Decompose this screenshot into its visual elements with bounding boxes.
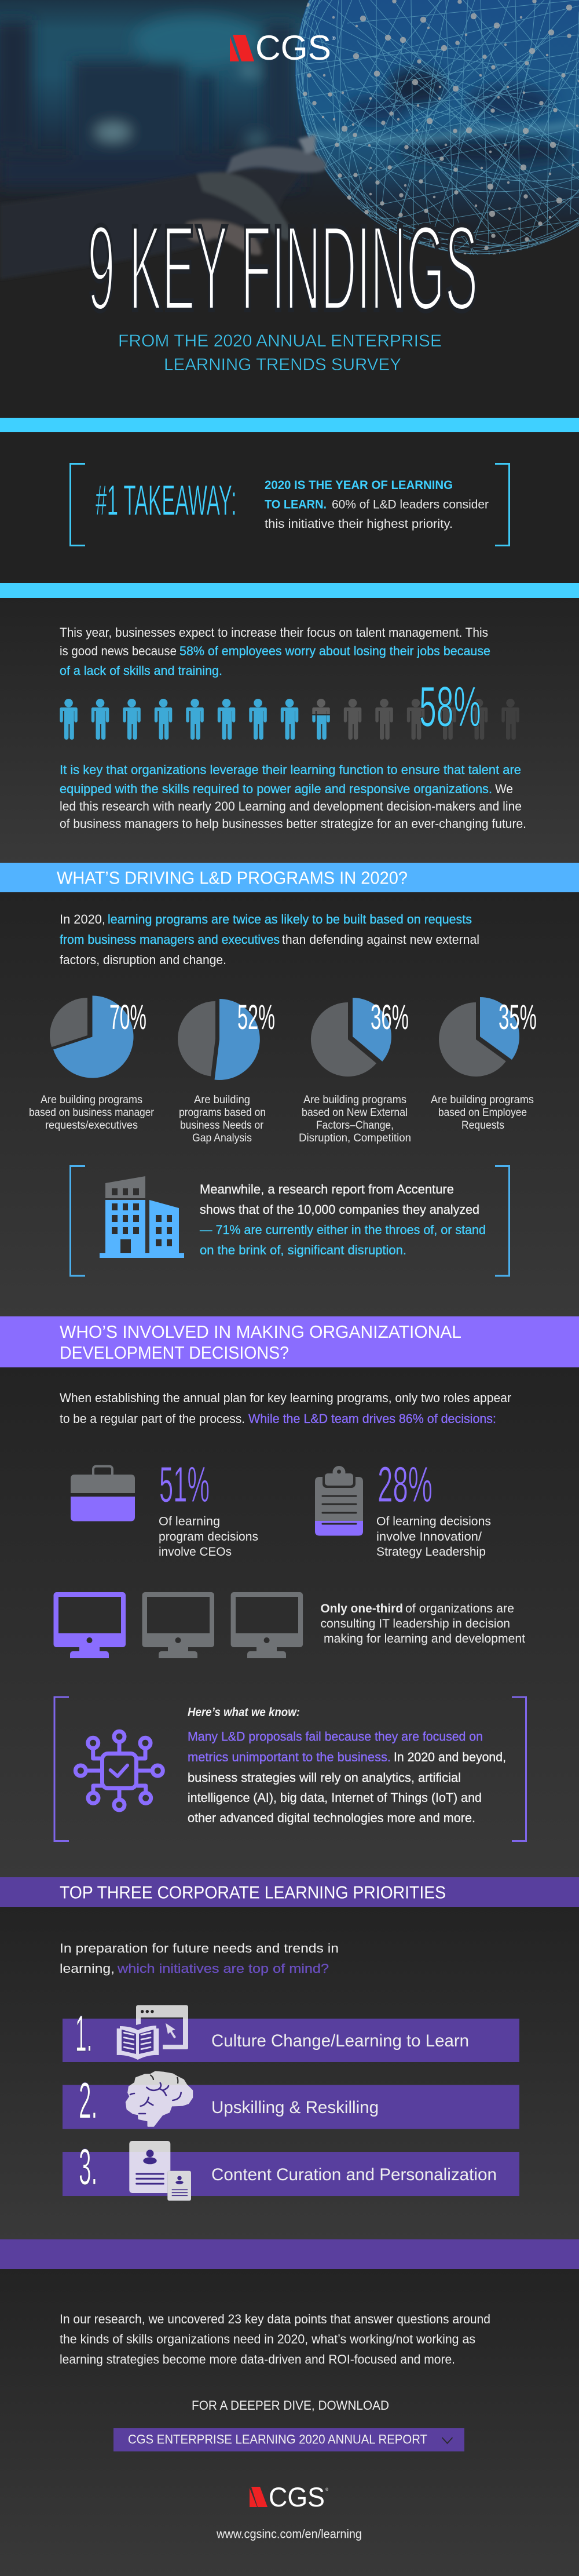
network sphere [295, 0, 579, 255]
section heading: what's driving L&D: WHAT’S DRIVING L&D PROGRAMS IN 2020? [57, 868, 408, 888]
section heading: top three priorities: TOP THREE CORPORATE LEARNING PRIORITIES [60, 1883, 446, 1903]
text block: drivers intro: than defending against new external [282, 932, 479, 947]
stat text: CEOs: involve CEOs [159, 1545, 232, 1559]
stat text: innovation: Of learning decisions [376, 1515, 491, 1528]
section heading: top three priorities [0, 1877, 579, 1907]
icon: brain [126, 2072, 192, 2126]
pie label: 70% [29, 1094, 155, 1132]
subtitle: LEARNING TRENDS SURVEY [164, 355, 401, 374]
takeaway text: 60% of L&D leaders consider [332, 498, 489, 511]
logo: CGS footer: CGS [269, 2482, 325, 2512]
icon: book and browser window [117, 2005, 188, 2060]
text block: intro [60, 625, 490, 678]
text block: leverage learning: It is key that organizations leverage their learning function to ensure that talent are [60, 762, 521, 777]
pie label: 36%: Disruption, Competition [299, 1132, 411, 1144]
pie chart: 70%: 70% [109, 998, 146, 1037]
section heading: who's involved [0, 1316, 579, 1367]
icon: circuit with check mark [75, 1731, 163, 1810]
download prompt: FOR A DEEPER DIVE, DOWNLOAD [192, 2398, 389, 2413]
subtitle [118, 331, 442, 374]
text block: here's what we know: metrics unimportant to the business. [188, 1750, 391, 1764]
priority 2 bar: 2. [79, 2073, 97, 2129]
panel: drivers [0, 892, 579, 1316]
stat: 28%: 28% [378, 1456, 433, 1513]
pie label: 36%: Are building programs [303, 1094, 406, 1106]
text block: intro: This year, businesses expect to increase their focus on talent management. This [60, 625, 488, 640]
hand reaching to sphere [0, 134, 326, 279]
pictogram: 58 percent of people [60, 699, 519, 740]
logo: CGS: ® [332, 35, 336, 41]
pie label: 52%: Gap Analysis [192, 1132, 252, 1144]
text block: research summary [60, 2312, 490, 2367]
text block: decisions intro: While the L&D team drives 86% of decisions: [248, 1411, 496, 1426]
text block: leverage learning: equipped with the skills required to power agile and responsive organizations. [60, 782, 492, 796]
text block: drivers intro: learning programs are twice as likely to be built based on requests [108, 912, 472, 926]
stat text: CEOs: program decisions [159, 1530, 258, 1544]
text block: drivers intro: factors, disruption and change. [60, 953, 226, 967]
text block: drivers intro: In 2020, [60, 912, 105, 926]
pie label: 52%: programs based on [179, 1107, 266, 1119]
stat: 51%: 51% [159, 1457, 210, 1513]
pie chart: 35%: 35% [499, 999, 537, 1037]
text block: IT leadership: making for learning and development [324, 1632, 525, 1645]
text block: Accenture callout [200, 1182, 486, 1257]
text block: Accenture callout: on the brink of, significant disruption. [200, 1243, 406, 1257]
takeaway heading: #1 TAKEAWAY: [96, 477, 237, 525]
stat text: innovation: involve Innovation/ [376, 1530, 482, 1544]
text block: Accenture callout: shows that of the 10,000 companies they analyzed [200, 1202, 479, 1217]
text block: decisions intro [60, 1391, 511, 1426]
text block: here's what we know: intelligence (AI), big data, Internet of Things (IoT) and [188, 1790, 482, 1805]
text block: here's what we know: In 2020 and beyond, [394, 1750, 506, 1764]
priority 3 bar [63, 2139, 519, 2201]
text block: intro: 58% of employees worry about losing their jobs because [179, 644, 490, 658]
pie label: 35%: Requests [461, 1119, 504, 1132]
takeaway text: TO LEARN. [265, 498, 327, 511]
priority 2 bar [63, 2072, 519, 2129]
pie label: 36%: Factors–Change, [316, 1119, 394, 1132]
text block: here's what we know: Many L&D proposals fail because they are focused on [188, 1730, 483, 1744]
panel: footer [0, 2269, 579, 2576]
text block: drivers intro [60, 912, 479, 967]
pie label: 70%: based on business manager [29, 1107, 155, 1119]
text block: IT leadership: of organizations are [405, 1601, 514, 1615]
priority 1 bar [63, 2005, 519, 2063]
text block: research summary: the kinds of skills organizations need in 2020, what’s working/not working as [60, 2332, 475, 2347]
pie chart: 70% [50, 995, 146, 1078]
pie label: 52% [179, 1094, 266, 1144]
pie label: 35% [431, 1094, 534, 1132]
pie chart: 52% [178, 998, 275, 1080]
brackets [54, 1697, 526, 1841]
panel: decision makers [0, 1367, 579, 1877]
pie label: 36% [299, 1094, 411, 1144]
icon: monitor, gray [231, 1592, 303, 1658]
text block: research summary: learning strategies become more data-driven and ROI-focused and more. [60, 2352, 455, 2367]
text block: decisions intro: to be a regular part of the process. [60, 1411, 245, 1426]
text block: leverage learning [60, 762, 526, 831]
text block: research summary: In our research, we uncovered 23 key data points that answer questions around [60, 2312, 490, 2326]
text block: here's what we know: other advanced digital technologies more and more. [188, 1811, 475, 1825]
text block: priorities intro: In preparation for future needs and trends in [60, 1941, 339, 1955]
icon: clipboard [315, 1466, 363, 1535]
website url: www.cgsinc.com/en/learning [216, 2528, 362, 2541]
stat text: innovation [376, 1515, 491, 1559]
icon: profile cards [129, 2141, 191, 2201]
text block: decisions intro: When establishing the annual plan for key learning programs, only two roles appear [60, 1391, 511, 1405]
button: annual report: CGS ENTERPRISE LEARNING 2020 ANNUAL REPORT [128, 2432, 427, 2446]
button: annual report [113, 2428, 464, 2451]
stat text: CEOs: Of learning [159, 1515, 220, 1528]
text block: Accenture callout: — 71% are currently either in the throes of, or stand [200, 1223, 486, 1237]
pie chart: 36%: 36% [371, 999, 409, 1037]
pie chart: 35% [439, 997, 537, 1077]
text block: intro: of a lack of skills and training. [60, 663, 222, 678]
text block: priorities intro: which initiatives are top of mind? [117, 1961, 329, 1976]
subtitle: FROM THE 2020 ANNUAL ENTERPRISE [118, 331, 442, 351]
brackets [71, 464, 510, 546]
pie label: 35%: based on Employee [438, 1107, 527, 1119]
text block: drivers intro: from business managers and executives [60, 932, 280, 947]
divider bar: cyan [0, 583, 579, 598]
pie label: 35%: Are building programs [431, 1094, 534, 1106]
icon: office building [100, 1176, 184, 1258]
panel: priorities [0, 1907, 579, 2239]
text block: IT leadership [321, 1601, 525, 1645]
stat: 58%: 58% [419, 675, 481, 739]
text block: here's what we know: Here’s what we know: [188, 1705, 300, 1719]
text block: priorities intro [60, 1941, 339, 1976]
stat text: CEOs [159, 1515, 258, 1559]
priority 1 bar: 1. [75, 2005, 92, 2063]
takeaway text: this initiative their highest priority. [265, 517, 453, 531]
text block: leverage learning: of business managers to help businesses better strategize for an ever-changing future. [60, 816, 526, 831]
icon: briefcase [71, 1466, 135, 1521]
divider bar: cyan [0, 418, 579, 432]
text block: priorities intro: learning, [60, 1961, 115, 1976]
pie chart: 36% [311, 998, 409, 1077]
pie label: 70%: Are building programs [41, 1094, 142, 1106]
pie label: 70%: requests/executives [45, 1119, 138, 1132]
pie chart: 52%: 52% [237, 998, 275, 1037]
divider bar: purple [0, 2239, 579, 2269]
pie label: 52%: Are building [194, 1094, 250, 1106]
section heading: what's driving L&D [0, 863, 579, 892]
text block: IT leadership: Only one-third [321, 1601, 403, 1615]
panel: number one takeaway [0, 432, 579, 583]
priority 2 bar: Upskilling & Reskilling [211, 2098, 379, 2117]
title: 9 KEY FINDINGS [87, 200, 478, 336]
pie label: 52%: business Needs or [180, 1119, 264, 1132]
priority 1 bar: Culture Change/Learning to Learn [211, 2031, 469, 2050]
text block: Accenture callout: Meanwhile, a research report from Accenture [200, 1182, 454, 1196]
section heading: who's involved: DEVELOPMENT DECISIONS? [60, 1343, 289, 1363]
icon: monitor, gray [142, 1592, 214, 1658]
icon: monitor, highlighted [53, 1592, 126, 1658]
text block: intro: is good news because [60, 644, 177, 658]
pie label: 36%: based on New External [302, 1107, 408, 1119]
stat text: innovation: Strategy Leadership [376, 1545, 486, 1559]
priority 3 bar: 3. [79, 2139, 97, 2195]
logo: CGS footer: ® [325, 2487, 329, 2492]
text block: IT leadership: consulting IT leadership in decision [321, 1617, 510, 1630]
logo: CGS: CGS [255, 28, 331, 67]
takeaway text: 2020 IS THE YEAR OF LEARNING [265, 479, 453, 492]
text block: here's what we know: business strategies will rely on analytics, artificial [188, 1771, 461, 1785]
hero background city [0, 0, 579, 418]
text block: leverage learning: We [495, 782, 513, 796]
icon: chevron [442, 2438, 453, 2443]
panel: talent management [0, 627, 579, 863]
takeaway text [265, 479, 489, 531]
section heading: who's involved: WHO’S INVOLVED IN MAKING ORGANIZATIONAL [60, 1322, 461, 1342]
brackets [71, 1166, 510, 1276]
panel: hero [0, 0, 579, 371]
text block: here's what we know [188, 1705, 506, 1825]
priority 3 bar: Content Curation and Personalization [211, 2165, 497, 2184]
text block: leverage learning: led this research with nearly 200 Learning and development decision-makers and line [60, 799, 522, 813]
